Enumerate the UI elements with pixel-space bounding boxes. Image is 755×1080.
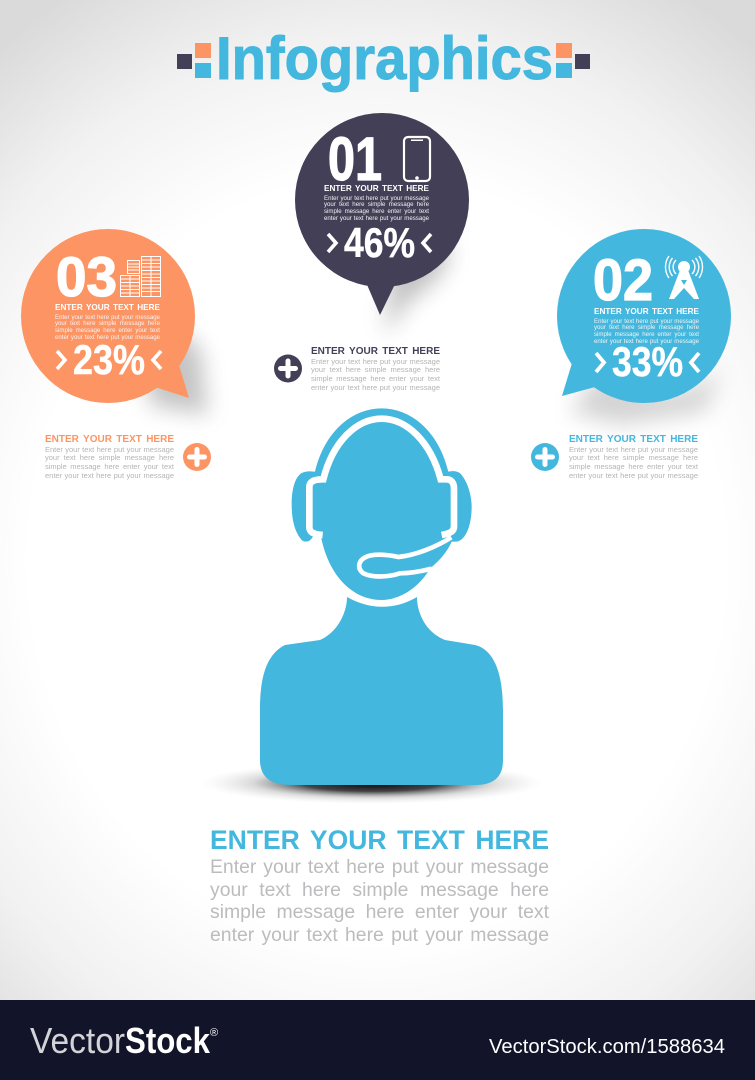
number 03: 03 [56, 245, 117, 308]
text: note 02: ENTER YOUR TEXT HERE [569, 434, 698, 445]
text: bubble 03 message: your text here simple message here [55, 320, 160, 327]
number 02: 02 [593, 248, 653, 313]
panel: bubble 01 [295, 113, 469, 335]
number 01: 01 [328, 125, 382, 193]
panel: bubble 02 [557, 229, 731, 425]
text: bubble 02 message: simple message here enter your text [594, 331, 699, 338]
text: main message [210, 825, 549, 950]
body [260, 597, 503, 785]
panel: note 01 [274, 346, 440, 394]
text: bubble 02 message: enter your text here put your message [594, 338, 699, 345]
text: note 03: Enter your text here put your message [45, 445, 174, 454]
icon: buildings [120, 256, 160, 296]
footer bar [0, 1000, 755, 1080]
text: bubble 03 message: ENTER YOUR TEXT HERE [55, 303, 160, 312]
text: bubble 01 message: ENTER YOUR TEXT HERE [324, 184, 429, 193]
text: note 01: simple message here enter your text [311, 374, 440, 383]
value 46%: 46% [344, 219, 415, 266]
text: note 03: your text here simple message here [45, 453, 174, 462]
head and headset [292, 408, 472, 600]
icon: plus blue [531, 443, 559, 471]
text: note 03 [45, 434, 174, 482]
value 23%: 23% [73, 336, 145, 383]
text: note 02 [569, 434, 698, 482]
icon: plus orange [183, 443, 211, 471]
text: bubble 01 message: Enter your text here put your message [324, 194, 429, 202]
text: bubble 03 message: Enter your text here put your message [55, 314, 160, 320]
icon: person with headset [260, 408, 503, 785]
value 33%: 33% [612, 338, 683, 385]
text: note 03: enter your text here put your message [45, 471, 174, 480]
text: bubble 02 message: your text here simple message here [594, 324, 699, 331]
text: bubble 01 message: enter your text here put your message [324, 215, 429, 222]
text: note 02: enter your text here put your message [569, 471, 698, 480]
panel: note 03 [45, 434, 211, 482]
text: note 01: Enter your text here put your message [311, 357, 440, 366]
text: note 02: simple message here enter your text [569, 462, 698, 471]
text: note 01 [311, 346, 440, 394]
text: bubble 03 message: enter your text here put your message [55, 334, 160, 341]
text: bubble 02 message: ENTER YOUR TEXT HERE [594, 307, 699, 316]
text: main message: enter your text here put your message [210, 924, 549, 946]
footer logo: VectorStock [30, 1020, 223, 1061]
text: main message: simple message here enter your text [210, 901, 549, 923]
text: note 03: ENTER YOUR TEXT HERE [45, 434, 174, 445]
text: bubble 02 message [594, 307, 699, 349]
title: Infographics [216, 25, 553, 92]
floor shadow [200, 762, 544, 804]
text: note 02: your text here simple message here [569, 453, 698, 462]
icon: smartphone [404, 137, 430, 181]
text: bubble 03 message: simple message here enter your text [55, 327, 160, 334]
footer id: VectorStock.com/1588634 [489, 1036, 725, 1058]
text: note 02: Enter your text here put your message [569, 445, 698, 454]
footer logo: ® [210, 1027, 218, 1039]
text: bubble 02 message: Enter your text here put your message [594, 318, 699, 324]
panel: note 02 [531, 434, 698, 482]
text: bubble 01 message: simple message here enter your text [324, 208, 429, 215]
text: main message: ENTER YOUR TEXT HERE [210, 825, 549, 855]
text: note 01: your text here simple message here [311, 365, 440, 374]
icon: plus dark [274, 354, 302, 382]
text: bubble 01 message [324, 184, 429, 226]
text: bubble 03 message [55, 303, 160, 345]
text: main message: your text here simple message here [210, 879, 549, 901]
text: main message: Enter your text here put your message [210, 856, 549, 878]
icon: signal tower [665, 256, 703, 299]
text: bubble 01 message: your text here simple message here [324, 201, 429, 208]
text: note 03: simple message here enter your text [45, 462, 174, 471]
text: note 01: ENTER YOUR TEXT HERE [311, 346, 440, 357]
panel: bubble 03 [21, 229, 208, 415]
text: note 01: enter your text here put your message [311, 383, 440, 392]
